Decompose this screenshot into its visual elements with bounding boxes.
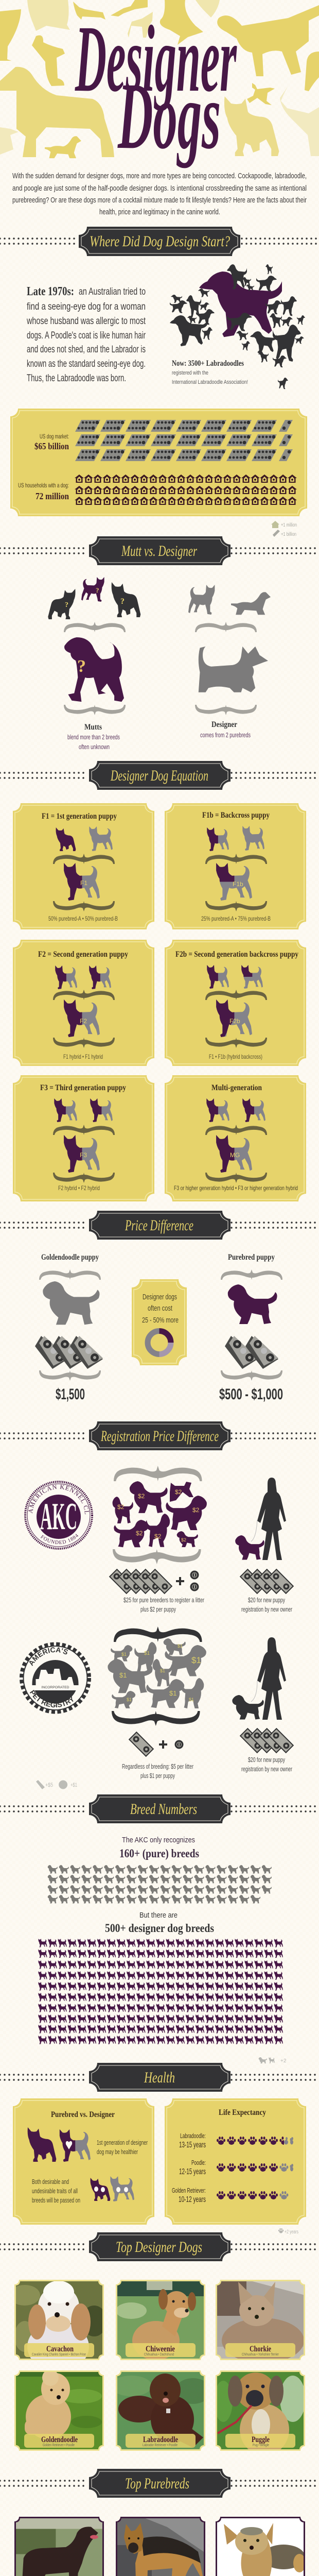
legend: market: +1 million xyxy=(281,522,297,528)
text: AKC recognizes xyxy=(119,1836,199,1860)
panel: F2b: F1 • F1b (hybrid backcross) xyxy=(209,1053,262,1060)
photo card: Chiweenie: Chihuahua • Dachshund xyxy=(144,2353,174,2357)
panel: F3: F3 xyxy=(80,1151,87,1159)
text: labradoodle years: Labradoodle: xyxy=(180,2132,206,2140)
panel: F1: F1 xyxy=(80,879,87,887)
panel: APR registration: $1 xyxy=(144,1651,150,1656)
text: golden retriever years xyxy=(172,2187,206,2204)
photo card: Puggle: Pug • Beagle xyxy=(253,2444,269,2447)
panel: F3: F3 = Third generation puppy xyxy=(40,1083,126,1092)
panel: APR registration: $1 xyxy=(127,1697,132,1702)
hero: dog silhouettes background xyxy=(0,0,319,158)
photo card: Goldendoodle: Goldendoodle xyxy=(41,2435,78,2444)
text: mutts caption: often unknown xyxy=(79,743,110,751)
photo card: Chorkie xyxy=(216,2280,305,2363)
panel: AKC registration: $2 xyxy=(136,1530,143,1537)
panel: F2: F2 = Second generation puppy xyxy=(38,950,128,959)
panel: multi-generation: MG xyxy=(230,1151,240,1159)
icon: single bill plus coin xyxy=(129,1732,183,1756)
icon: America's Pet Registry badge: AMERICA'S xyxy=(29,1647,68,1666)
panel: AKC registration xyxy=(110,1466,207,1613)
photo card: Yorkshire Terrier xyxy=(216,2517,306,2576)
panel: life expectancy: Life Expectancy xyxy=(219,2108,266,2117)
panel: F3: F2 hybrid • F2 hybrid xyxy=(58,1184,100,1192)
panel: F1b: 25% purebred-A • 75% purebred-B xyxy=(201,915,271,922)
text: us households: 72 million xyxy=(36,491,69,501)
heading: Where Did Dog Design Start xyxy=(0,227,319,256)
text: golden retriever years: 10-12 years xyxy=(179,2195,206,2204)
photo card: Cavachon xyxy=(14,2280,104,2360)
panel: designer xyxy=(188,585,271,739)
panel: APR registration: $1 xyxy=(121,1652,127,1657)
icon: two parent dogs xyxy=(188,585,271,615)
heading: Health: Health xyxy=(144,2069,175,2086)
heading: Registration Price Difference: Registration Price Difference xyxy=(100,1428,219,1445)
chart: golden retriever paws xyxy=(217,2191,288,2199)
panel: life expectancy xyxy=(165,2098,306,2225)
text: now 3500 labradoodles: Now: 3500+ Labradoodles xyxy=(172,359,244,368)
text: AKC recognizes: 160+ (pure) breeds xyxy=(119,1847,199,1860)
text: healthier: dog may be healthier xyxy=(97,2148,138,2156)
text: traits: Both desirable and xyxy=(32,2178,69,2185)
panel: APR registration: $1 xyxy=(191,1655,201,1665)
heading: Where Did Dog Design Start: Where Did Dog Design Start? xyxy=(90,233,230,250)
icon: money stacks xyxy=(225,1336,278,1369)
text: us households: US households with a dog: xyxy=(18,482,69,489)
panel: APR registration: $1 xyxy=(178,1643,183,1649)
panel: APR registration: $1 xyxy=(169,1689,176,1697)
text: 500 designer breeds: But there are xyxy=(139,1911,178,1920)
panel: APR new owner fee xyxy=(240,1728,293,1773)
chart: money stacks xyxy=(75,420,293,461)
panel: F2 xyxy=(13,940,154,1066)
text: APR litter fee: Regardless of breeding: $5 per litter xyxy=(122,1763,193,1770)
panel: F3 xyxy=(13,1075,154,1201)
text: Late 1970s story xyxy=(26,285,146,384)
heading: Top Designer Dogs: Top Designer Dogs xyxy=(116,2239,202,2256)
legend: registration: +$5 xyxy=(45,1782,53,1788)
text: labradoodle years xyxy=(179,2132,206,2149)
heading: Price Difference xyxy=(0,1211,319,1240)
text: poodle years: 12-15 years xyxy=(179,2167,206,2176)
text: pure breeder fee xyxy=(123,1597,204,1613)
text: poodle years xyxy=(179,2159,206,2176)
text: designer caption xyxy=(200,720,251,739)
text: APR litter fee: plus $1 per puppy xyxy=(140,1772,175,1780)
panel: multi-generation: Multi-generation xyxy=(211,1083,262,1092)
callout: designer dogs cost: Designer dogs xyxy=(143,1293,177,1301)
text: APR litter fee xyxy=(122,1763,193,1780)
icon: mutt dog xyxy=(64,637,124,702)
heading: Breed Numbers: Breed Numbers xyxy=(130,1801,197,1818)
text: Late 1970s story: Late 1970s: xyxy=(27,285,74,298)
photo card: Labradoodle: Labrador Retriever • Poodle xyxy=(143,2444,178,2447)
text: mutts caption xyxy=(67,723,120,751)
panel: goldendoodle price: Goldendoodle puppy xyxy=(41,1253,99,1262)
text: pure breeder fee: $25 for pure breeders to register a litter xyxy=(123,1597,204,1604)
text: Late 1970s story: and does not shed, and the Labrador is xyxy=(27,344,146,355)
text: us dog market: US dog market: xyxy=(40,433,69,440)
text: Late 1970s story: dogs. A Poodle's coat is like human hair xyxy=(27,330,146,341)
icon: three parent dogs: ? xyxy=(65,601,68,609)
photo card: German Shepherd xyxy=(116,2517,205,2576)
panel: F1: F1 = 1st generation puppy xyxy=(42,812,117,821)
heading: Top Purebreds xyxy=(0,2469,319,2498)
text: Late 1970s story: whose husband was allergic to most xyxy=(26,315,146,327)
panel: purebred price xyxy=(219,1253,283,1403)
callout: designer dogs cost: 25 - 50% more xyxy=(142,1316,179,1325)
text: labradoodle years: 13-15 years xyxy=(179,2141,206,2149)
panel: APR registration: $1 xyxy=(160,1668,165,1673)
panel: goldendoodle price: $1,500 xyxy=(56,1386,85,1403)
panel: AKC new owner fee: $20 for new puppy xyxy=(248,1597,286,1604)
chart: donut xyxy=(148,1331,171,1354)
text: pure breeder fee: plus $2 per puppy xyxy=(140,1606,176,1613)
photo card: Chiweenie xyxy=(116,2280,205,2360)
panel: F2: F2 xyxy=(80,1018,87,1025)
icon: America's Pet Registry badge: PET REGISTRY xyxy=(30,1690,74,1707)
text: Late 1970s story: an Australian tried to xyxy=(79,286,146,297)
text: traits: breeds will be passed on xyxy=(32,2196,80,2204)
heading: Designer Dog Equation xyxy=(0,761,319,790)
icon: AKC badge xyxy=(24,1481,93,1550)
text: designer caption: Designer xyxy=(211,720,237,729)
legend: market xyxy=(271,521,297,537)
chart: dog houses xyxy=(75,474,297,505)
icon: three parent dogs: ? xyxy=(96,586,99,594)
icon: woman walking dark puppy xyxy=(232,1637,286,1720)
text: traits: undesirable traits of all xyxy=(32,2187,78,2195)
legend: market: +1 billion xyxy=(281,532,296,537)
icon: thumbs dogs xyxy=(91,2176,134,2201)
photo card: Labradoodle xyxy=(116,2370,205,2451)
icon: designer dog xyxy=(199,647,268,692)
heading: Designer Dog Equation: Designer Dog Equation xyxy=(110,767,208,784)
panel: AKC new owner fee xyxy=(240,1569,293,1613)
heading: Price Difference: Price Difference xyxy=(125,1217,193,1234)
title: Dogs xyxy=(117,63,221,169)
panel: F1 xyxy=(13,803,154,929)
panel: F1: 50% purebred-A • 50% purebred-B xyxy=(48,915,118,922)
panel: F2b xyxy=(165,940,306,1066)
heading: Top Purebreds: Top Purebreds xyxy=(125,2475,189,2492)
title xyxy=(75,6,237,169)
icon: America's Pet Registry badge: INCORPORATED xyxy=(41,1686,69,1689)
legend: years xyxy=(278,2228,298,2235)
text: designer caption: comes from 2 purebreds xyxy=(200,731,251,739)
panel: AKC new owner fee: registration by new owner xyxy=(241,1606,292,1613)
text: Late 1970s story: Thus, the Labradoodle was born. xyxy=(27,372,126,384)
text: us households xyxy=(18,482,69,501)
text: poodle years: Poodle: xyxy=(191,2159,206,2166)
icon: cash row plus coins xyxy=(110,1569,199,1594)
text: mutts caption: Mutts xyxy=(84,723,102,732)
panel: APR registration xyxy=(108,1626,206,1780)
intro text xyxy=(12,172,307,216)
icon: AKC badge: AMERICAN KENNEL CLUB xyxy=(28,1485,89,1514)
panel: purebred price: $500 - $1,000 xyxy=(219,1386,283,1403)
icon: money stacks xyxy=(35,1336,103,1369)
callout: designer dogs cost xyxy=(132,1279,187,1365)
panel: APR registration: $1 xyxy=(119,1671,127,1679)
heading: Mutt vs. Designer xyxy=(0,536,319,565)
text: 500 designer breeds: 500+ designer dog breeds xyxy=(105,1922,214,1935)
text: now 3500 labradoodles xyxy=(172,359,248,385)
panel: purebred price: Purebred puppy xyxy=(228,1253,275,1262)
panel: F2: F1 hybrid • F1 hybrid xyxy=(63,1053,103,1060)
photo card: Cavachon: Cavalier King Charles Spaniel • Bichon Frise xyxy=(32,2353,86,2357)
legend: breeds: +2 xyxy=(280,2058,287,2064)
callout: designer dogs cost: often cost xyxy=(148,1304,173,1313)
text: AKC recognizes: The AKC only recognizes xyxy=(122,1836,195,1844)
heading: Top Designer Dogs xyxy=(0,2232,319,2261)
chart: 160 gray dogs xyxy=(48,1865,272,1904)
photo card: Labrador Retriever xyxy=(14,2517,104,2576)
text: now 3500 labradoodles: registered with the xyxy=(172,370,208,376)
text: mutts caption: blend more than 2 breeds xyxy=(67,733,120,741)
panel: mutts xyxy=(48,577,140,751)
panel: market and households xyxy=(10,409,307,516)
panel: AKC registration: $2 xyxy=(154,1533,162,1540)
text: Late 1970s story: find a seeing-eye dog for a woman xyxy=(27,301,146,312)
panel: APR registration: $1 xyxy=(189,1697,194,1702)
photo card: Chorkie: Chorkie xyxy=(250,2345,271,2353)
text: healthier xyxy=(97,2139,148,2156)
icon: America's Pet Registry badge xyxy=(20,1642,91,1714)
photo card: Goldendoodle xyxy=(14,2369,104,2451)
panel: purebred vs designer: Purebred vs. Designer xyxy=(51,2110,115,2119)
panel: APR new owner fee: $20 for new puppy xyxy=(248,1756,286,1764)
panel: goldendoodle price xyxy=(35,1253,103,1403)
heading: Mutt vs. Designer: Mutt vs. Designer xyxy=(121,543,197,560)
panel: AKC registration: $2 xyxy=(181,1537,186,1543)
photo card: Goldendoodle: Golden Retriever • Poodle xyxy=(43,2444,75,2447)
photo card: Chiweenie: Chiweenie xyxy=(146,2345,175,2353)
text: healthier: 1st generation of designer xyxy=(97,2139,148,2146)
text: us dog market: $65 billion xyxy=(34,441,69,451)
photo card: Labradoodle: Labradoodle xyxy=(143,2435,178,2444)
legend: registration: +$1 xyxy=(70,1782,77,1788)
chart: labradoodle cluster xyxy=(170,264,305,389)
text: 500 designer breeds xyxy=(105,1911,214,1935)
panel: F1b xyxy=(165,803,306,929)
text: now 3500 labradoodles: International Labradoodle Association! xyxy=(172,379,248,385)
text: golden retriever years: Golden Retriever: xyxy=(172,2187,206,2194)
panel: purebred vs designer xyxy=(13,2098,154,2225)
panel: APR new owner fee: registration by new owner xyxy=(241,1766,292,1773)
panel: F1b: F1b = Backcross puppy xyxy=(202,811,270,820)
heading: Breed Numbers xyxy=(0,1794,319,1823)
intro text: health, price and legitimacy in the canine world. xyxy=(99,208,220,216)
panel: AKC registration: $2 xyxy=(117,1503,125,1511)
icon: purebred and designer dogs xyxy=(28,2127,91,2162)
icon: three parent dogs xyxy=(48,577,140,619)
text: Late 1970s story: known as the standard seeing-eye dog. xyxy=(27,358,146,369)
photo card: Puggle xyxy=(214,2370,306,2455)
panel: multi-generation xyxy=(165,1075,306,1201)
icon: AKC badge: FOUNDED 1884 xyxy=(40,1534,78,1545)
panel: AKC registration: $2 xyxy=(175,1488,182,1496)
legend: years: +2 years xyxy=(285,2229,298,2235)
icon: AKC badge: AKC xyxy=(40,1496,77,1538)
chart: 500 purple dogs xyxy=(39,1939,283,2044)
icon: woman walking purple puppy xyxy=(235,1478,286,1560)
chart: poodle paws xyxy=(217,2163,293,2172)
panel: AKC registration: $2 xyxy=(192,1506,200,1514)
legend: breeds xyxy=(259,2057,287,2064)
text: us dog market xyxy=(34,433,69,451)
legend: registration xyxy=(36,1780,77,1789)
heading: Registration Price Difference xyxy=(0,1421,319,1450)
chart: labradoodle paws xyxy=(217,2136,293,2145)
icon: gray puppies xyxy=(108,1638,206,1708)
icon: three parent dogs: ? xyxy=(120,597,125,606)
panel: F1b: F1b xyxy=(233,880,243,888)
panel: AKC registration: $2 xyxy=(138,1493,145,1500)
icon: purple puppies xyxy=(113,1481,207,1547)
panel: F2b: F2b xyxy=(229,1018,240,1025)
text: traits xyxy=(32,2178,80,2204)
photo card: Chorkie: Chihuahua • Yorkshire Terrier xyxy=(242,2353,279,2357)
photo card: Puggle: Puggle xyxy=(252,2435,270,2444)
icon: mutt dog: ? xyxy=(77,657,86,676)
photo card: Cavachon: Cavachon xyxy=(46,2345,74,2353)
heading: Health xyxy=(0,2063,319,2092)
